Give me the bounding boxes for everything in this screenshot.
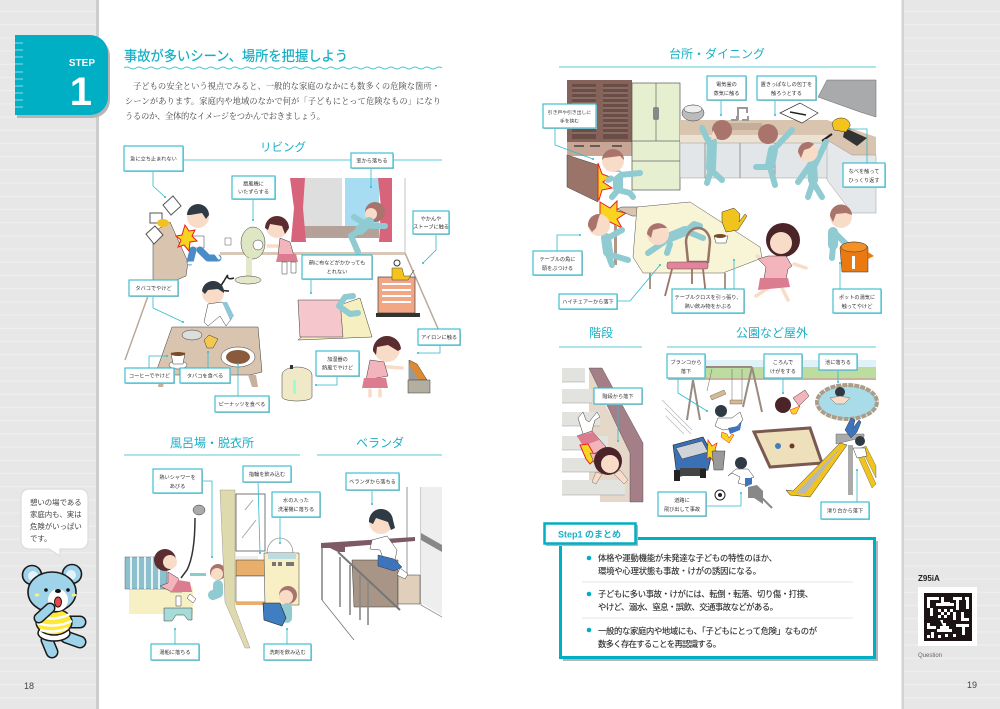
label: swallowing ring — [243, 466, 292, 554]
label: touching iron — [417, 329, 461, 354]
label: hot shower: 熱いシャワーを — [159, 473, 196, 481]
label: humidifier burn: 加湿器の — [327, 355, 348, 363]
heading rule: veranda — [317, 454, 442, 456]
summary point 3 — [587, 626, 818, 649]
label: caught in sliding door: 引き戸や引き出しに — [548, 109, 591, 116]
label: eating cigarette — [180, 351, 231, 384]
heading rule: park — [667, 346, 876, 348]
label: falling in washing machine — [272, 492, 321, 544]
label: hitting head on table corner — [533, 234, 583, 276]
panel: living room — [124, 140, 461, 413]
summary point 3: 一般的な家庭内や地域にも、「子どもにとって危険」なものが — [598, 626, 818, 636]
heading rule: kitchen — [559, 66, 876, 68]
illustration: park scene — [662, 360, 877, 508]
right page margin band — [902, 0, 1000, 709]
label: falling from veranda — [346, 473, 400, 505]
illustration: living room scene — [125, 178, 443, 401]
label: eating peanuts — [215, 363, 270, 413]
label: hitting head on table corner: テーブルの角に — [539, 255, 576, 263]
heading rule: living room — [124, 159, 442, 161]
heading rule: bathroom — [124, 454, 300, 456]
label: running into road — [658, 492, 742, 517]
question code: Question — [918, 653, 942, 659]
panel: veranda — [317, 435, 442, 640]
heading: bathroom: 風呂場・脱衣所 — [170, 435, 254, 450]
label: falling in washing machine: 洗濯機に落ちる — [278, 505, 314, 513]
label: running into road: 道路に — [674, 496, 690, 504]
heading: living room: リビング — [260, 140, 306, 154]
label: caught in sliding door — [543, 104, 597, 160]
heading: kitchen: 台所・ダイニング — [669, 46, 765, 61]
summary box — [560, 538, 878, 661]
label: cannot stop suddenly: 急に立ち止まれない — [130, 154, 177, 162]
label: falling in pond — [819, 354, 858, 383]
illustration: kitchen scene — [567, 80, 876, 300]
label: cigarette burn: タバコでやけど — [135, 284, 172, 292]
intro text: シーンがあります。家庭内や地域のなかで何が「子どもにとって危険なもの」になり — [125, 96, 441, 106]
label: touching kettle or stove: ストーブに触る — [413, 222, 449, 230]
label: falling from high chair: ハイチェアーから落下 — [562, 298, 614, 306]
icon: bear mascot — [22, 564, 82, 652]
summary tab: Step1 のまとめ — [558, 530, 621, 540]
heading: stairs: 階段 — [589, 325, 613, 340]
label: overturning pot: ひっくり返す — [848, 176, 880, 184]
label: running into road: 飛び出して事故 — [664, 505, 701, 513]
question code: Z95iA — [918, 574, 940, 583]
page title: 事故が多いシーン、場所を把握しよう — [124, 48, 348, 64]
illustration: bathroom scene — [125, 490, 299, 648]
summary point 3: 数多く存在することを再認識する。 — [598, 639, 721, 649]
panel: step 1 summary — [544, 524, 878, 661]
label: touching pot steam — [833, 262, 882, 314]
speech bubble: 家庭内も、実は — [30, 510, 82, 519]
label: eating peanuts: ピーナッツを食べる — [219, 401, 265, 408]
label: cloth over face: とれない — [327, 268, 347, 276]
label: humidifier burn — [315, 351, 360, 386]
label: touching pot steam: ポットの湯気に — [839, 293, 875, 301]
intro text: 子どもの安全という視点でみると、一般的な家庭のなかにも数多くの危険な箇所・ — [133, 81, 440, 91]
panel: bathroom — [124, 435, 321, 661]
summary point 2: 子どもに多い事故・けがには、転倒・転落、切り傷・打撲、 — [598, 589, 813, 599]
summary point 1 — [587, 553, 777, 576]
label: coffee burn — [125, 355, 175, 384]
label: falling from window — [351, 153, 394, 188]
speech bubble: 憩いの場である — [30, 498, 82, 507]
speech bubble — [21, 489, 88, 556]
label: falling from slide — [821, 469, 870, 520]
label: coffee burn: コーヒーでやけど — [129, 372, 171, 380]
label: cloth over face — [302, 255, 373, 294]
intro text — [125, 81, 441, 121]
label: tripping injury: ころんで — [773, 359, 793, 366]
label: falling from slide: 滑り台から落下 — [827, 506, 863, 514]
summary tab — [544, 524, 638, 546]
label: swallowing detergent — [264, 628, 312, 661]
label: cannot stop suddenly — [124, 146, 184, 198]
label: tripping injury — [764, 354, 803, 394]
label: touching kitchen knife: 触ろうとする — [771, 89, 802, 97]
left page margin band — [0, 0, 99, 709]
label: falling from high chair — [559, 264, 661, 310]
speech bubble: 危険がいっぱい — [30, 522, 82, 531]
label: overturning pot — [843, 128, 886, 188]
label: falling into bathtub: 湯船に落ちる — [159, 648, 191, 656]
label: eating cigarette: タバコを食べる — [187, 372, 223, 380]
illustration: veranda scene — [321, 487, 442, 640]
panel: park and outdoors — [658, 326, 877, 520]
label: swallowing detergent: 洗剤を飲み込む — [269, 648, 306, 656]
label: cigarette burn — [129, 280, 184, 323]
panel: stairs — [559, 325, 643, 502]
label: pulling tablecloth — [672, 259, 745, 314]
label: cloth over face: 顔に布などがかかっても — [309, 258, 365, 266]
label: swallowing ring: 指輪を飲み込む — [249, 470, 285, 478]
page number 18: 18 — [24, 681, 34, 691]
label: falling from swing — [667, 354, 708, 412]
label: playing with fan: いたずらする — [238, 188, 269, 196]
label: falling from swing: 落下 — [681, 367, 691, 375]
step 1 tab: 1 — [70, 70, 92, 114]
label: playing with fan: 扇風機に — [243, 180, 264, 188]
label: touching kettle or stove — [413, 211, 450, 264]
label: touching rice cooker steam: 電気釜の — [716, 80, 737, 88]
label: falling on stairs — [594, 388, 643, 442]
heading: veranda: ベランダ — [356, 435, 404, 450]
label: falling from veranda: ベランダから落ちる — [349, 478, 396, 486]
label: falling in washing machine: 水の入った — [283, 496, 309, 504]
label: caught in sliding door: 手を挟む — [560, 118, 579, 124]
speech bubble: です。 — [30, 534, 51, 543]
label: hot shower — [153, 469, 213, 558]
label: touching kettle or stove: やかんや — [421, 214, 441, 222]
label: hitting head on table corner: 頭をぶつける — [542, 265, 573, 272]
illustration: stairs scene — [562, 368, 643, 502]
label: touching rice cooker steam: 蒸気に触る — [714, 89, 739, 97]
page number 19: 19 — [967, 680, 977, 690]
panel: kitchen and dining — [533, 46, 886, 314]
label: touching kitchen knife: 置きっぱなしの包丁を — [761, 80, 812, 88]
heading rule: stairs — [559, 346, 642, 348]
label: playing with fan — [232, 176, 276, 221]
label: touching kitchen knife — [757, 76, 817, 116]
label: humidifier burn: 熱風でやけど — [322, 364, 354, 372]
label: overturning pot: なべを触って — [849, 167, 879, 175]
label: tripping injury: けがをする — [770, 367, 796, 375]
summary point 1: 体格や運動機能が未発達な子どもの特性のほか、 — [598, 553, 777, 563]
step 1 tab: STEP — [69, 58, 95, 69]
label: falling on stairs: 階段から落下 — [602, 392, 634, 400]
label: falling from window: 窓から落ちる — [356, 156, 388, 164]
label: falling from swing: ブランコから — [670, 358, 702, 366]
label: falling in pond: 池に落ちる — [825, 358, 851, 366]
step 1 tab — [15, 35, 110, 118]
intro text: うるのか、全体的なイメージをつかんでおきましょう。 — [125, 111, 325, 121]
question code — [918, 574, 977, 659]
label: pulling tablecloth: テーブルクロスを引っ張り、 — [675, 293, 741, 301]
heading: park: 公園など屋外 — [736, 326, 808, 340]
label: hot shower: あびる — [170, 482, 185, 490]
summary point 1: 環境や心理状態も事故・けがの誘因になる。 — [598, 566, 761, 576]
summary point 2: やけど、溺水、窒息・誤飲、交通事故などがある。 — [598, 602, 778, 612]
label: touching rice cooker steam — [707, 76, 747, 116]
label: pulling tablecloth: 熱い飲み物をかぶる — [685, 302, 731, 310]
summary point 2 — [587, 589, 813, 612]
label: touching iron: アイロンに触る — [421, 333, 457, 341]
label: touching pot steam: 触ってやけど — [842, 302, 873, 310]
label: falling into bathtub — [151, 628, 200, 661]
